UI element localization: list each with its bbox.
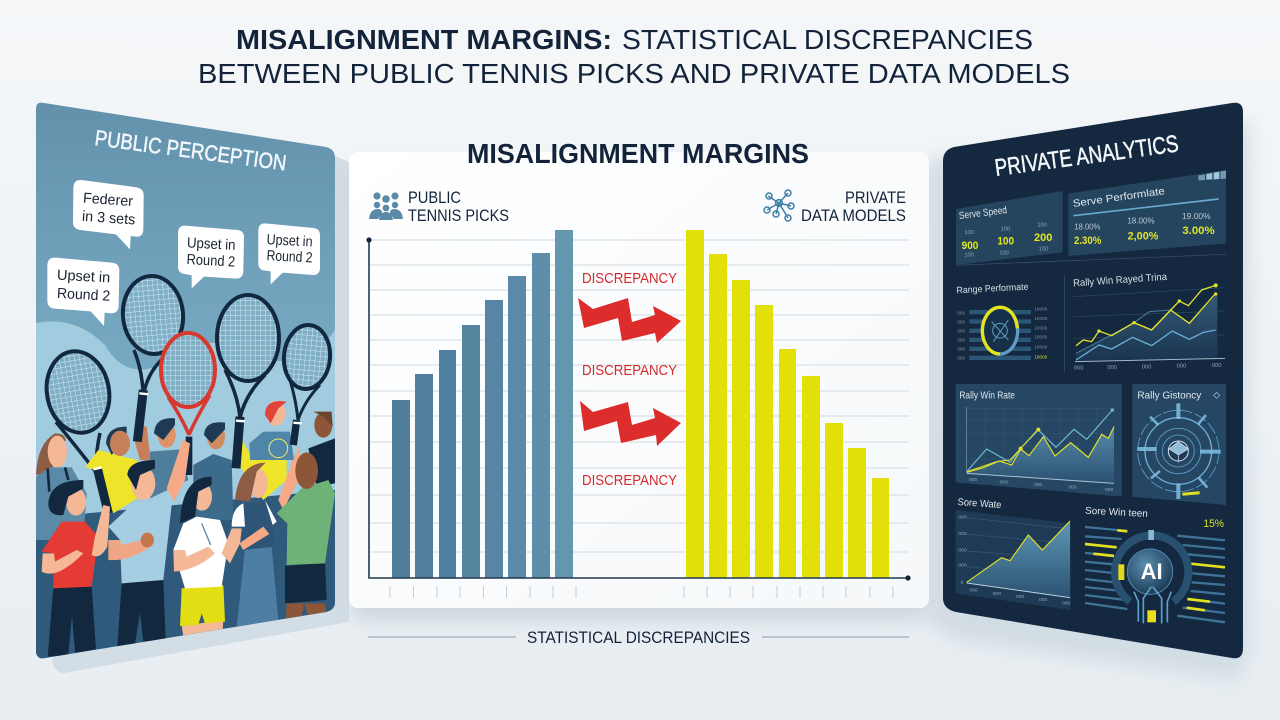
label: private data models xyxy=(801,188,906,225)
area chart: score rate: 000 xyxy=(993,591,1001,597)
bar chart: public picks xyxy=(392,230,573,578)
speech bubble: Upset in Round 2 right xyxy=(258,223,320,284)
arrow: discrepancy 2 xyxy=(580,401,681,446)
label: discrepancy 3: DISCREPANCY xyxy=(582,472,677,489)
speech bubble: Upset in Round 2 right: Upset in xyxy=(266,232,313,251)
fan: red shirt woman xyxy=(36,480,110,657)
AI module xyxy=(1085,506,1225,623)
AI module: AI xyxy=(1141,559,1163,584)
speech bubble: Federer in 3 sets xyxy=(73,180,144,249)
line chart: rally win xyxy=(1073,272,1225,372)
title: BETWEEN PUBLIC TENNIS PICKS AND PRIVATE DATA MODELS xyxy=(198,58,1070,89)
gauge chart: Range Performate xyxy=(956,282,1029,295)
line chart: rally win: 000 xyxy=(1074,366,1083,372)
speech bubble: Upset in Round 2 centre: Round 2 xyxy=(186,252,236,271)
card: serve speed: 100 xyxy=(964,253,974,259)
card: serve speed: Serve Speed xyxy=(958,205,1008,222)
gauge chart: 10000 xyxy=(1034,316,1048,321)
chart card: rally win rate: 000 xyxy=(1034,482,1043,488)
area chart: score rate: 000 xyxy=(1016,594,1025,600)
speech bubble: Federer in 3 sets: Federer xyxy=(82,191,134,210)
chart axes xyxy=(366,237,911,598)
crowd of fans xyxy=(36,390,335,660)
speech bubbles xyxy=(47,180,320,326)
card: serve speed: 100 xyxy=(964,230,974,236)
panel: public perception xyxy=(36,103,349,673)
gauge chart: 10000 xyxy=(1034,354,1048,359)
card: serve speed: 200 xyxy=(1034,232,1052,244)
card: serve performance: 2,00% xyxy=(1128,230,1158,242)
line chart: rally win: Rally Win Rayed Trina xyxy=(1073,272,1168,289)
card: serve speed: 100 xyxy=(1001,226,1010,232)
gauge chart: 10000 xyxy=(1034,345,1048,350)
card: serve performance: 18.00% xyxy=(1074,221,1101,231)
area chart: score rate xyxy=(956,497,1071,610)
area chart: score rate: 000 xyxy=(958,514,967,520)
speech bubble: Upset in Round 2 left xyxy=(47,258,119,326)
line chart: rally win: 000 xyxy=(1142,364,1151,370)
gauge chart xyxy=(956,282,1048,361)
gauge chart: 000 xyxy=(957,310,966,315)
AI module: Sore Win teen xyxy=(1085,506,1148,520)
panel: centre comparison chart xyxy=(349,138,929,620)
gauge chart: 000 xyxy=(957,356,966,361)
area chart: score rate: Sore Wate xyxy=(957,497,1002,511)
chart card: rally win rate: 000 xyxy=(1068,485,1077,491)
card: serve performance: Serve Performlate xyxy=(1072,186,1166,210)
fan: yellow shirt xyxy=(85,425,151,513)
tennis racket heads xyxy=(40,274,333,472)
fan: red hair xyxy=(240,401,294,500)
fan: dark blue shirt xyxy=(193,422,233,520)
chart card: rally win rate xyxy=(956,384,1122,497)
chart card: rally win rate: 000 xyxy=(1105,487,1114,493)
gauge chart: 000 xyxy=(957,338,966,343)
label: public tennis picks: PUBLIC xyxy=(408,188,461,207)
area chart: score rate: 000 xyxy=(958,563,967,569)
card: serve performance: 3.00% xyxy=(1182,225,1215,237)
label: private data models: PRIVATE xyxy=(845,188,906,207)
title: STATISTICAL DISCREPANCIES xyxy=(622,24,1033,55)
speech bubble: Upset in Round 2 left: Round 2 xyxy=(56,286,111,305)
label: discrepancy 1: DISCREPANCY xyxy=(582,270,677,287)
line chart: rally win: 000 xyxy=(1177,364,1186,370)
card: serve speed: 100 xyxy=(1039,247,1048,253)
fan: woman far left xyxy=(36,433,87,540)
gauge chart: 000 xyxy=(957,347,966,352)
heading: public perception: PUBLIC PERCEPTION xyxy=(93,125,288,175)
racket grips xyxy=(93,390,302,513)
fan: green shirt man xyxy=(277,452,335,620)
speech bubble: Upset in Round 2 centre: Upset in xyxy=(186,235,236,254)
heading: private analytics: PRIVATE ANALYTICS xyxy=(993,130,1180,182)
arrow: discrepancy 1 xyxy=(578,298,681,343)
card: serve performance: 2.30% xyxy=(1074,235,1101,247)
speech bubble: Upset in Round 2 left: Upset in xyxy=(56,268,111,286)
speech bubble: Upset in Round 2 centre xyxy=(178,226,244,288)
area chart: score rate: 0 xyxy=(961,580,964,586)
card: serve speed: 100 xyxy=(1037,222,1047,228)
card: serve speed: 900 xyxy=(962,240,978,252)
chart card: rally win rate: 000 xyxy=(1000,480,1008,486)
card: serve performance: 18.00% xyxy=(1127,216,1155,226)
label: public tennis picks: TENNIS PICKS xyxy=(408,206,509,225)
panel: private analytics xyxy=(925,103,1250,680)
icon: network xyxy=(764,190,794,221)
fan: dark shirt right xyxy=(308,412,335,487)
gauge chart: 10000 xyxy=(1034,325,1048,330)
heading: misalignment margins: MISALIGNMENT MARGINS xyxy=(467,138,809,169)
area chart: score rate: 000 xyxy=(958,548,967,554)
fan: light blue shirt man xyxy=(108,440,190,647)
radar card: rally efficiency xyxy=(1132,384,1226,505)
card: serve speed xyxy=(956,191,1063,265)
background hill xyxy=(36,321,335,514)
bar chart: private models xyxy=(686,230,889,578)
footer label: statistical discrepancies: STATISTICAL DISCREPANCIES xyxy=(527,628,750,647)
line chart: rally win: 000 xyxy=(1212,363,1221,369)
icon: people xyxy=(369,192,403,220)
speech bubble: Federer in 3 sets: in 3 sets xyxy=(81,209,136,229)
fan: white shirt woman xyxy=(173,477,228,636)
fan: navy tank woman xyxy=(222,445,300,627)
speech bubble: Upset in Round 2 right: Round 2 xyxy=(266,248,313,267)
label: private data models: DATA MODELS xyxy=(801,206,906,225)
label: public tennis picks xyxy=(408,188,509,225)
card: serve performance xyxy=(1068,170,1226,256)
card: serve speed: 100 xyxy=(999,250,1009,256)
card: serve performance: 19.00% xyxy=(1182,211,1211,221)
area chart: score rate: 000 xyxy=(1062,600,1071,606)
gauge chart: 10000 xyxy=(1034,335,1048,340)
gauge chart: 000 xyxy=(957,320,966,325)
radar card: rally efficiency: Rally Gistoncy xyxy=(1137,391,1201,402)
chart card: rally win rate: 000 xyxy=(969,477,978,483)
chart card: rally win rate: Rally Win Rate xyxy=(959,391,1015,402)
gauge chart: 10000 xyxy=(1034,306,1048,311)
fan: grey-blue shirt xyxy=(150,418,188,498)
title: MISALIGNMENT MARGINS: xyxy=(236,24,612,55)
AI module: 15% xyxy=(1203,518,1224,530)
area chart: score rate: 000 xyxy=(969,588,978,594)
gauge chart: 000 xyxy=(957,329,966,334)
title xyxy=(198,24,1070,89)
area chart: score rate: 000 xyxy=(1039,597,1048,603)
card: serve speed: 100 xyxy=(997,236,1014,248)
line chart: rally win: 000 xyxy=(1107,365,1117,371)
label: discrepancy 2: DISCREPANCY xyxy=(582,362,677,379)
area chart: score rate: 000 xyxy=(958,531,967,537)
